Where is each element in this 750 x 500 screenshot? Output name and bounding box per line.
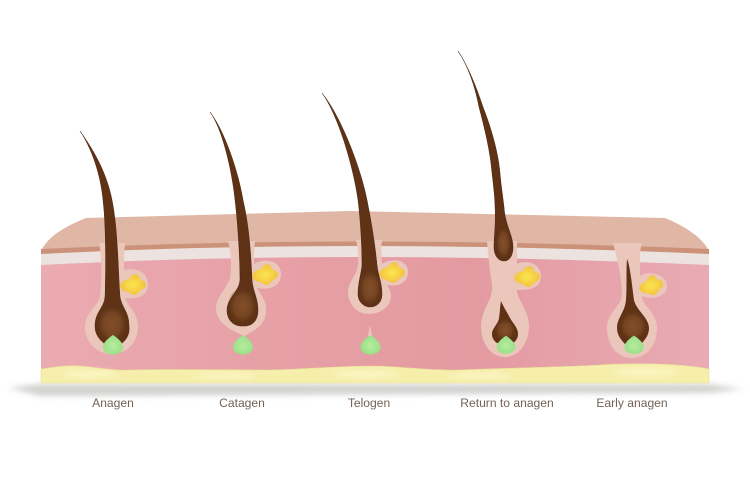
ground shadow [8, 384, 742, 396]
hair [617, 259, 649, 344]
sebaceous gland [252, 264, 278, 285]
follicle: return to anagen [458, 51, 541, 357]
sebaceous gland [120, 274, 146, 295]
old club hair [458, 51, 513, 261]
follicle sheath [348, 240, 408, 314]
hair [80, 131, 129, 344]
hair [322, 93, 382, 307]
fat layer [41, 364, 709, 383]
pale band [41, 246, 709, 266]
hair bulb [358, 269, 382, 307]
panel: skin cross-section [41, 51, 709, 383]
hair [210, 112, 258, 326]
connecting strand [241, 333, 246, 337]
sebaceous gland [637, 274, 665, 297]
hair bulb [228, 287, 258, 325]
follicle sheath [85, 243, 148, 354]
fat lobules [62, 368, 677, 380]
sebaceous gland [514, 266, 540, 287]
new hair bulb [494, 318, 516, 342]
follicle: early anagen [607, 243, 667, 358]
connecting strand [368, 325, 372, 336]
hair bulb [96, 304, 128, 344]
label: Return to anagen: Return to anagen [460, 396, 554, 410]
label: Catagen: Catagen [219, 396, 265, 410]
follicle: catagen [210, 112, 281, 354]
follicle: telogen [322, 93, 408, 354]
label: Anagen: Anagen [92, 396, 134, 410]
new hair [492, 301, 518, 343]
dark stripe of the epidermis [41, 242, 709, 255]
label: Telogen: Telogen [348, 396, 390, 410]
dermal papilla [360, 335, 380, 354]
epidermis layer [41, 211, 709, 262]
dermal papilla [103, 335, 123, 354]
sebaceous gland [379, 262, 405, 283]
dermal papilla [497, 336, 515, 354]
club hair highlight [496, 226, 512, 260]
dermal papilla [624, 336, 644, 354]
follicle: anagen [80, 131, 148, 354]
follicle sheath [481, 241, 541, 357]
label: Early anagen: Early anagen [596, 396, 668, 410]
hair bulb [618, 310, 648, 342]
dermal papilla [233, 335, 253, 354]
dermis layer [41, 257, 709, 375]
follicle sheath [607, 243, 667, 358]
follicle sheath [216, 241, 281, 336]
